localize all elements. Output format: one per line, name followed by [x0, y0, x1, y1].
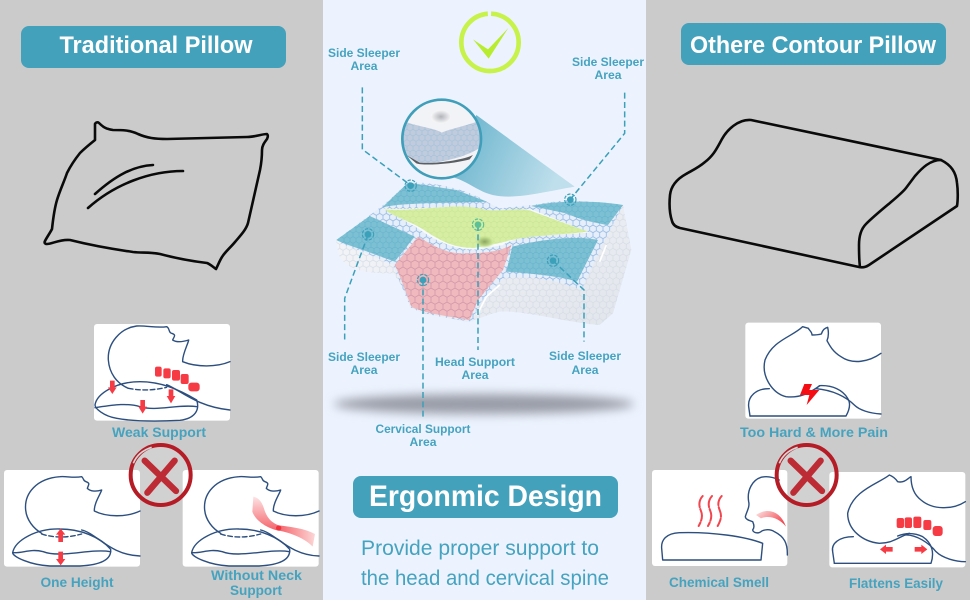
- icon: contour pillow outline: [670, 120, 958, 267]
- label: side sleeper area lower right: [549, 349, 621, 377]
- illustration: one height: [4, 470, 140, 567]
- label: side sleeper area lower left: [328, 350, 400, 377]
- text: support description: [361, 537, 609, 590]
- heading: Traditional Pillow: Traditional Pillow: [60, 32, 253, 59]
- label: Without Neck Support: [211, 567, 302, 598]
- label: cervical support area: [376, 422, 470, 449]
- illustration: without neck support: [183, 470, 319, 567]
- label: side sleeper area top left: Area: [350, 59, 378, 73]
- heading: Ergonmic Design: Ergonmic Design: [369, 480, 602, 513]
- label: Too Hard & More Pain: Too Hard & More Pain: [740, 424, 888, 440]
- text: support description: Provide proper support to: [361, 537, 599, 560]
- illustration: weak support: [94, 324, 230, 421]
- icon: red cross right: [777, 445, 837, 505]
- label: head support area: [435, 355, 515, 382]
- label: side sleeper area lower right: Area: [572, 363, 599, 377]
- panel: other contour pillow background: [646, 0, 970, 600]
- label: Without Neck Support: Without Neck: [211, 567, 302, 583]
- illustration: chemical smell: [652, 470, 787, 566]
- label: head support area: Area: [462, 368, 489, 382]
- label: side sleeper area lower right: Side Sleeper: [549, 349, 621, 363]
- label: cervical support area: Area: [410, 435, 437, 449]
- label: Chemical Smell: Chemical Smell: [669, 574, 769, 590]
- heading: Othere Contour Pillow: [681, 23, 946, 65]
- panel: traditional pillow background: [0, 0, 323, 600]
- label: side sleeper area top right: Side Sleeper: [572, 55, 644, 69]
- label: Weak Support: Weak Support: [112, 424, 206, 440]
- label: head support area: Head Support: [435, 355, 515, 369]
- label: Flattens Easily: Flattens Easily: [849, 575, 943, 591]
- label: One Height: One Height: [40, 574, 114, 590]
- illustration: too hard and more pain: [745, 323, 881, 419]
- label: Without Neck Support: Support: [230, 582, 282, 598]
- label: side sleeper area top left: [328, 46, 400, 73]
- label: cervical support area: Cervical Support: [376, 422, 470, 436]
- icon: traditional pillow outline: [45, 122, 268, 269]
- callout lines and markers: [345, 87, 625, 417]
- illustration: flattens easily: [829, 472, 965, 567]
- label: side sleeper area lower left: Side Sleeper: [328, 350, 400, 364]
- heading: Othere Contour Pillow: Othere Contour Pillow: [690, 32, 936, 59]
- label: side sleeper area top right: Area: [594, 68, 622, 82]
- image: ergonomic pillow: [336, 182, 631, 325]
- icon: green check mark: [461, 14, 519, 71]
- panel: ergonomic design background: [323, 0, 646, 600]
- label: side sleeper area top right: [572, 55, 644, 82]
- label: side sleeper area lower left: Area: [350, 363, 378, 377]
- heading: Traditional Pillow: [21, 26, 286, 68]
- graphic: magnified detail lens: [402, 100, 575, 197]
- shadow under pillow: [334, 394, 634, 414]
- label: side sleeper area top left: Side Sleeper: [328, 46, 400, 60]
- text: support description: the head and cervical spine: [361, 567, 609, 590]
- icon: red cross left: [131, 445, 191, 505]
